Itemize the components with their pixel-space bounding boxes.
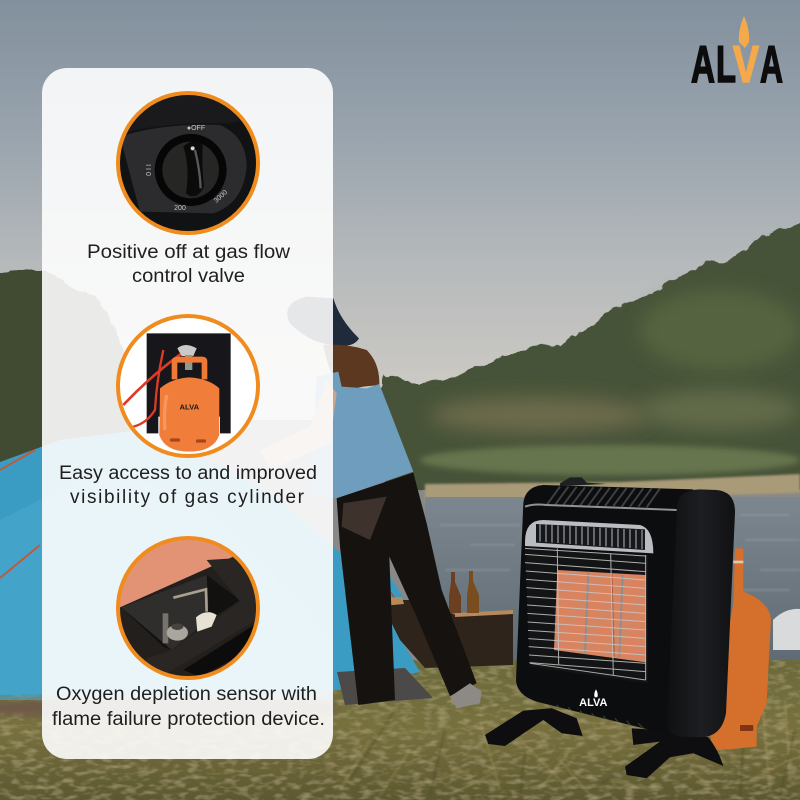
- logo: ALVA: V: [733, 36, 759, 94]
- right foot: [625, 728, 723, 778]
- lake water: [425, 497, 800, 662]
- object at right edge: [773, 609, 800, 650]
- caption: gas flow control: Positive off at gas flow: [87, 242, 290, 263]
- caption: oxygen sensor: Oxygen depletion sensor with: [56, 684, 317, 705]
- body front: [516, 485, 693, 737]
- wire guard: [525, 548, 646, 680]
- far shore: [425, 474, 800, 504]
- icon: gas cylinder behind heater: [118, 316, 258, 456]
- caption: gas flow control: [87, 242, 290, 287]
- icon: gas flow control knob: 200: [174, 205, 186, 212]
- grass: [0, 660, 800, 800]
- icon: gas cylinder behind heater: ALVA: [179, 402, 200, 411]
- tent: [0, 430, 420, 695]
- logo: ALVA: [691, 16, 783, 94]
- icon: gas flow control knob: 3000: [213, 189, 229, 205]
- forested hills: [0, 210, 800, 490]
- ceramic burner: [554, 570, 646, 662]
- gas cylinder: [710, 548, 771, 751]
- icon: gas flow control knob: [113, 90, 267, 237]
- caption: oxygen sensor: flame failure protection device.: [52, 709, 325, 730]
- radiant panel: [525, 548, 648, 683]
- top control knob: [560, 477, 607, 486]
- icon: gas flow control knob: 0 I I: [146, 164, 153, 176]
- icon: oxygen depletion sensor: [113, 533, 263, 683]
- wooden crate: [380, 600, 513, 668]
- top vents: [525, 487, 677, 510]
- caption: oxygen sensor: [52, 684, 325, 730]
- trousers: [337, 473, 477, 705]
- logo: ALVA: A: [760, 36, 783, 94]
- heater product: [485, 477, 771, 778]
- left foot: [485, 708, 583, 746]
- logo: ALVA: A: [691, 36, 715, 94]
- sky: [0, 0, 800, 420]
- beer bottles: [449, 571, 479, 613]
- brand on heater: ALVA: [579, 697, 608, 709]
- icon: gas flow control knob: ●OFF: [187, 125, 205, 132]
- hair: [323, 345, 379, 392]
- chrome grille: [525, 520, 653, 553]
- side panel: [667, 489, 735, 737]
- logo: ALVA: L: [716, 36, 736, 94]
- caption: gas cylinder: visibility of gas cylinder: [70, 487, 305, 508]
- caption: gas cylinder: [59, 463, 317, 508]
- person: [260, 297, 482, 708]
- panel: features card: [42, 68, 333, 759]
- icon: flame: [739, 16, 749, 48]
- shirt: [310, 372, 413, 498]
- caption: gas flow control: control valve: [132, 266, 245, 287]
- hat: [287, 297, 359, 346]
- bottom vents: [556, 704, 644, 728]
- shoe: [450, 683, 482, 708]
- caption: gas cylinder: Easy access to and improved: [59, 463, 317, 484]
